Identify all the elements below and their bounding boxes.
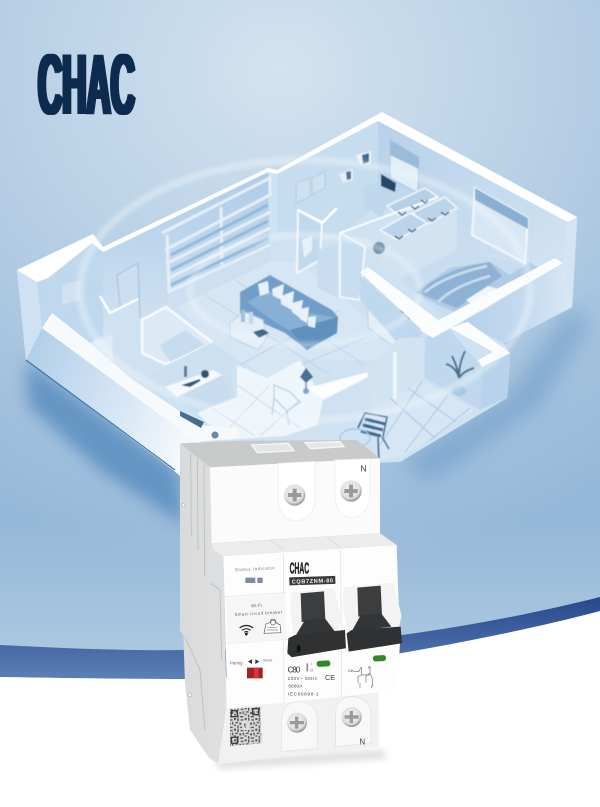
console with plant (368, 297, 413, 352)
window: office (390, 140, 419, 193)
on off: O (310, 669, 313, 673)
kitchen block (307, 371, 372, 423)
toggle guards (291, 583, 402, 641)
wall shelves (339, 151, 371, 183)
upper right screw (340, 480, 362, 502)
door post (393, 352, 397, 399)
white bottom area (0, 611, 600, 807)
on off (307, 662, 313, 673)
living tile lines (205, 280, 372, 378)
front wall logo mark (180, 411, 218, 438)
brand: CHAC (290, 559, 309, 578)
blind bedroom (475, 188, 528, 229)
exterior left inner face (37, 278, 52, 328)
side casing (180, 443, 227, 763)
model label: CQB7ZNM-80 (292, 578, 333, 586)
balcony room wall (425, 330, 482, 410)
balcony chair (340, 413, 389, 459)
balcony plant (446, 351, 474, 396)
on off: I (311, 662, 312, 666)
partition strips (360, 258, 563, 367)
cushions (258, 281, 316, 328)
mid body (223, 545, 400, 708)
upper screw wells (278, 459, 370, 521)
logo: CHAC (38, 36, 135, 132)
cast shadow right (400, 307, 590, 482)
front wall top strip (42, 313, 240, 442)
rating text: C80 (288, 665, 301, 674)
exterior right wall (463, 217, 577, 343)
wifi signal rings (80, 160, 530, 420)
lower background shade (0, 520, 600, 690)
work text: Work (263, 657, 272, 662)
shelves (162, 178, 270, 292)
partition column (317, 243, 338, 298)
shelf shadows (171, 205, 268, 285)
wall posters (296, 171, 325, 203)
upper body (210, 458, 380, 543)
partition wall face (360, 275, 422, 358)
floor (17, 112, 577, 470)
shoulder seams (270, 537, 340, 550)
balcony floor (372, 380, 475, 460)
top face (180, 440, 380, 467)
wardrobe (340, 188, 457, 278)
breaking: 6000A (288, 683, 303, 688)
kitchen floor tiles (197, 360, 323, 440)
vanity room (137, 342, 233, 413)
left room door recess (62, 280, 80, 305)
tub room (142, 307, 213, 364)
status led (245, 578, 263, 583)
top terminal openings (252, 442, 344, 453)
lower right screw (342, 707, 362, 727)
N bottom: N (359, 737, 365, 746)
bath door (100, 263, 142, 365)
bed (415, 262, 538, 312)
app icon (264, 619, 281, 633)
front wall bottom edge (26, 360, 175, 470)
red switch (247, 668, 263, 678)
status indicator text: Status Indicator (235, 565, 276, 572)
upper left screw (284, 484, 305, 506)
exterior front wall (26, 328, 200, 490)
outer wall tops (17, 112, 577, 282)
pairing arrows (248, 659, 259, 664)
circuit breaker (180, 440, 402, 768)
glass door (367, 337, 425, 408)
green leds (317, 655, 386, 667)
circuit diagram: N (368, 666, 370, 670)
wardrobe hangers (395, 200, 449, 239)
desk (363, 180, 415, 218)
balcony outer wall (480, 353, 510, 410)
circuit diagram (348, 666, 373, 688)
right wall end (563, 217, 577, 307)
wifi icon (240, 625, 253, 635)
ce mark: CE (325, 673, 335, 682)
wave band (0, 597, 600, 679)
centre plant (300, 368, 313, 394)
sink vanity (165, 366, 232, 413)
bedroom floor (400, 250, 540, 322)
window: bedroom (472, 188, 528, 263)
shoulder (212, 533, 397, 556)
wardrobe plant (373, 242, 385, 254)
lower body (218, 692, 379, 764)
left toggle (287, 591, 346, 657)
model label (289, 576, 335, 586)
wifi panel (226, 593, 287, 644)
apartment floor plan (17, 112, 590, 525)
right toggle (347, 586, 402, 652)
lower wells (282, 697, 371, 752)
breaker drop shadow (213, 750, 387, 768)
N top: N (360, 463, 367, 473)
circuit diagram: Ctrl (348, 669, 354, 673)
monitor (381, 174, 396, 192)
exterior left face (17, 270, 42, 360)
qr code: t (244, 724, 246, 730)
wall: left room (48, 243, 103, 343)
door frame (297, 208, 337, 273)
pairing text: Paring (230, 660, 243, 665)
smart breaker text: Smart circuit breaker (234, 609, 283, 617)
standard: IEC60898-1 (288, 691, 319, 696)
cabinets (168, 246, 271, 312)
wall: back (277, 121, 378, 235)
wifi text: Wi-Fi (251, 603, 262, 608)
cast shadow left (26, 360, 185, 525)
voltage: 230V~ 50Hz (288, 676, 317, 681)
coffee table (230, 310, 269, 350)
blind office (390, 140, 419, 169)
side ribs (182, 453, 222, 730)
balcony tiles (380, 380, 470, 452)
lower left screw (287, 713, 307, 733)
wall: back left (103, 172, 270, 340)
living room floor (177, 262, 412, 378)
toggle hole (297, 645, 301, 652)
qr code (230, 707, 262, 746)
column seams (225, 549, 342, 703)
bedroom door (340, 233, 365, 300)
dining set (272, 385, 300, 425)
wall: right interior (378, 121, 568, 265)
left floor (90, 335, 133, 380)
sofa (240, 275, 338, 350)
